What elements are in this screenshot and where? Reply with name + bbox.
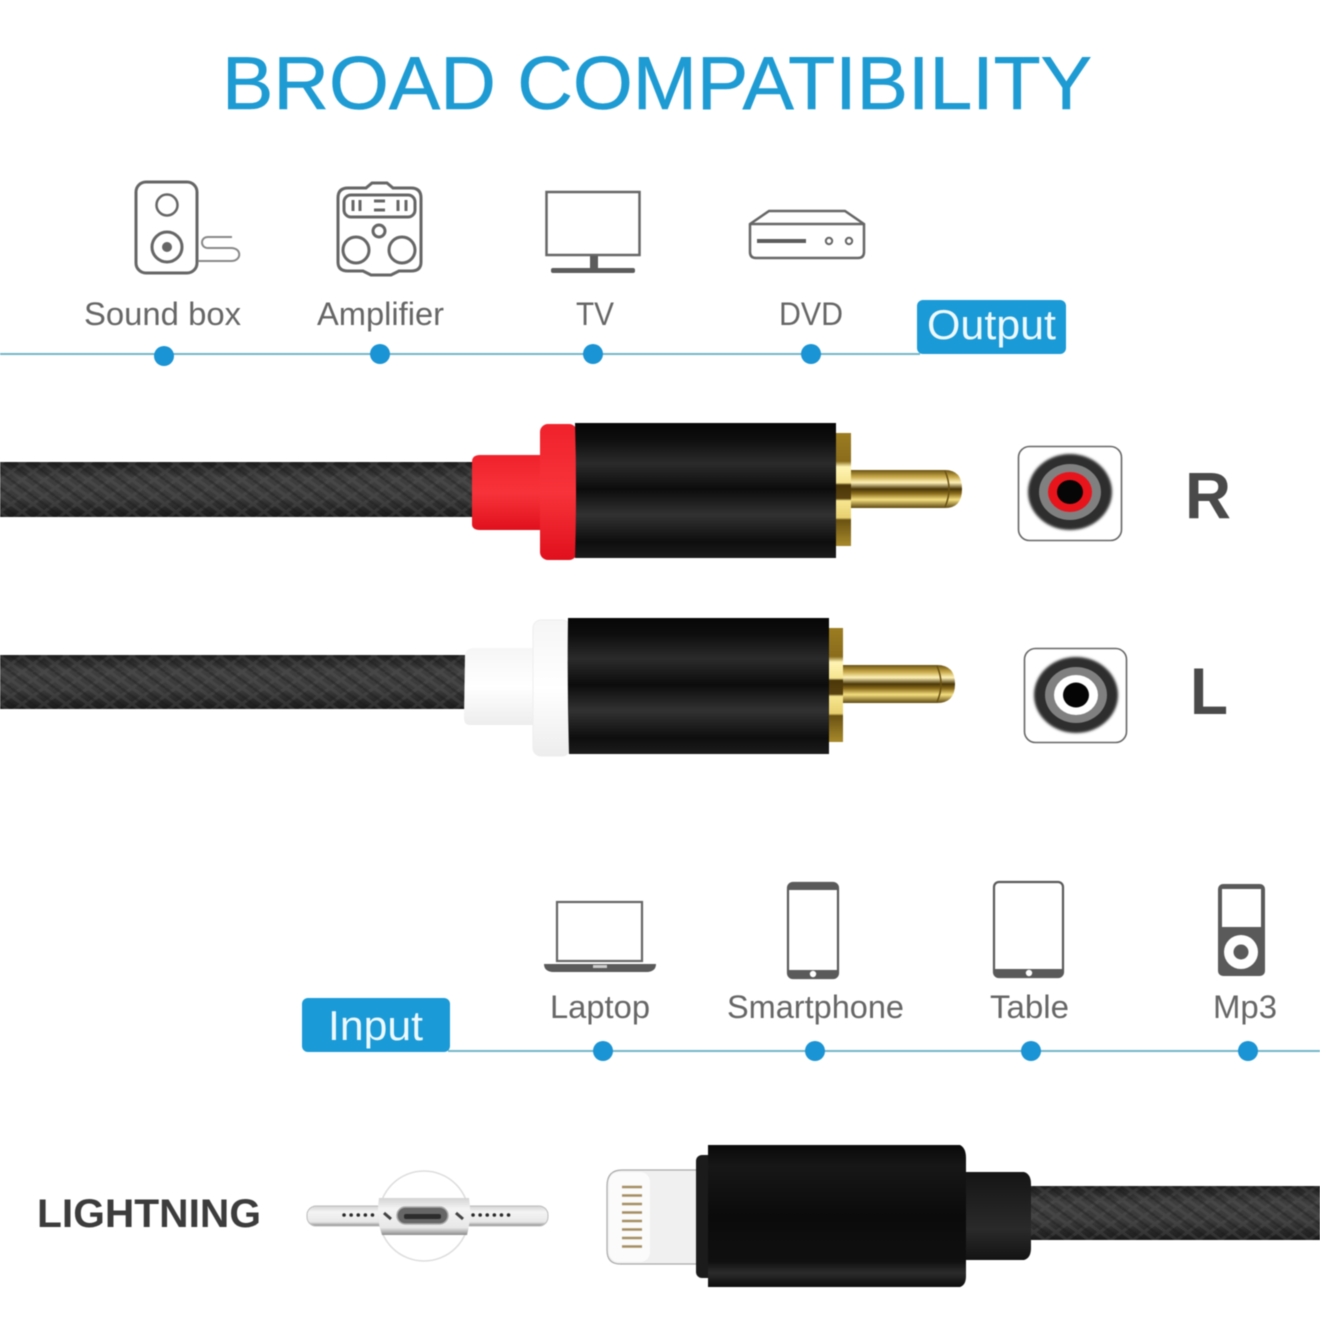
- contact pad: [609, 1172, 650, 1262]
- label: lightning: LIGHTNING: [37, 1192, 261, 1236]
- braided cable: white channel: [0, 655, 468, 709]
- marker: laptop: [593, 1041, 613, 1061]
- lightning port: [397, 1207, 448, 1224]
- icon: white rca jack: [1024, 648, 1126, 742]
- illustration: phone charging port: [307, 1171, 548, 1261]
- marker: smartphone: [805, 1041, 825, 1061]
- port tongue: [404, 1214, 441, 1219]
- marker: table: [1021, 1041, 1041, 1061]
- white collar: [533, 620, 570, 756]
- label: table: Table: [990, 989, 1069, 1025]
- connector body: [708, 1145, 966, 1287]
- icon: amplifier: [338, 183, 421, 275]
- magnified edge: [378, 1198, 470, 1235]
- icon: tablet: [994, 882, 1063, 977]
- gold pin: white channel: [843, 665, 955, 703]
- rca plug: white left channel: [0, 618, 955, 756]
- lightning connector: [607, 1145, 1320, 1287]
- icon: laptop: [544, 902, 656, 972]
- input badge: Input: [328, 1002, 423, 1049]
- red boot: [472, 455, 541, 530]
- icon: mp3 player: [1218, 884, 1265, 976]
- input device row: [302, 882, 1320, 1061]
- label: mp3: Mp3: [1213, 989, 1277, 1025]
- marker: amplifier: [370, 344, 390, 364]
- phone edge: [307, 1206, 548, 1226]
- strain relief: [960, 1172, 1031, 1260]
- marker: mp3: [1238, 1041, 1258, 1061]
- label: amplifier: Amplifier: [317, 296, 444, 332]
- label: smartphone: Smartphone: [727, 989, 904, 1025]
- metal tip: [607, 1170, 699, 1264]
- red collar: [540, 424, 577, 560]
- output device row: [0, 182, 1066, 366]
- icon: sound box: [136, 182, 239, 273]
- gold collar: red channel: [835, 433, 851, 546]
- input badge: [302, 998, 450, 1052]
- icon: red rca jack: [1018, 446, 1122, 540]
- speaker holes left: [344, 1213, 374, 1217]
- braided cable: red channel: [0, 462, 475, 517]
- braided cable: lightning: [1025, 1186, 1320, 1240]
- rca plug: red right channel: [0, 423, 962, 560]
- marker: sound box: [154, 346, 174, 366]
- icon: smartphone: [788, 883, 838, 978]
- title: BROAD COMPATIBILITY: [222, 41, 1092, 125]
- black barrel: white channel: [568, 618, 829, 754]
- label: r: R: [1185, 458, 1231, 532]
- label: tv: TV: [576, 296, 615, 332]
- gold contacts: [622, 1187, 642, 1246]
- magnifier circle: [379, 1171, 469, 1261]
- gold collar: white channel: [828, 628, 843, 742]
- output badge: Output: [927, 301, 1056, 348]
- output timeline: [0, 353, 920, 355]
- connector collar: [696, 1155, 714, 1278]
- gold pin: red channel: [851, 470, 962, 508]
- marker: dvd: [801, 344, 821, 364]
- black barrel: red channel: [575, 423, 836, 558]
- icon: tv: [546, 192, 640, 273]
- label: dvd: DVD: [779, 296, 843, 332]
- magnified screws: [384, 1213, 463, 1219]
- icon: dvd player: [750, 211, 864, 258]
- label: sound box: Sound box: [84, 296, 241, 332]
- label: l: L: [1190, 654, 1228, 728]
- marker: tv: [583, 344, 603, 364]
- label: laptop: Laptop: [550, 989, 650, 1025]
- speaker holes right: [473, 1213, 512, 1217]
- white boot: [464, 648, 534, 725]
- input timeline: [448, 1050, 1320, 1052]
